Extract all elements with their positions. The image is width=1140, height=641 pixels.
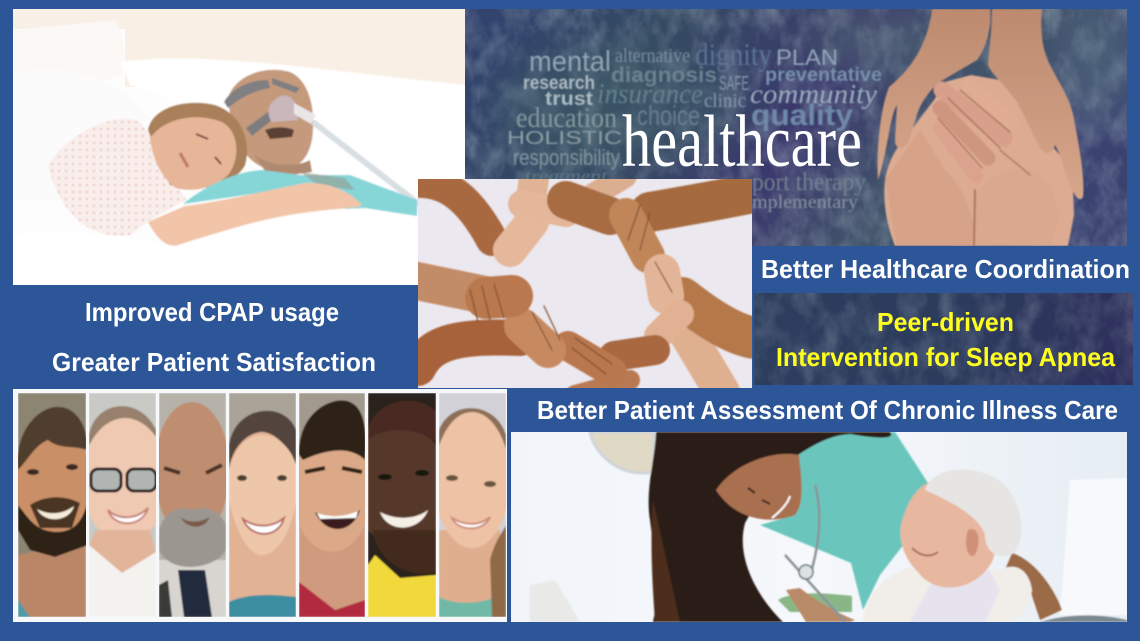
caption: improved CPAP usage and satisfaction xyxy=(52,297,376,377)
arm xyxy=(148,183,362,246)
panel: smiling faces strip xyxy=(13,389,510,622)
word cloud: insurance xyxy=(597,79,703,110)
face 3: older bearded man xyxy=(159,393,226,617)
nurse face xyxy=(716,454,802,520)
photo: couple sleeping with CPAP mask xyxy=(13,9,465,285)
word cloud: choice xyxy=(637,100,700,131)
word cloud: clinic xyxy=(704,90,746,112)
word cloud: trust xyxy=(545,89,594,110)
patient fleece xyxy=(863,567,1032,622)
word cloud: quality xyxy=(751,99,853,132)
word cloud: mental xyxy=(529,46,611,78)
word cloud xyxy=(507,36,882,213)
nurse scrubs xyxy=(760,432,928,610)
photo: linked arms teamwork circle xyxy=(412,172,758,395)
icon: caring hands xyxy=(877,9,1083,246)
word cloud: education xyxy=(516,103,617,134)
word cloud: HOLISTIC xyxy=(507,128,622,148)
text: greater patient satisfaction: Greater Patient Satisfaction xyxy=(52,347,376,377)
patient head xyxy=(900,479,996,588)
face 1: curly haired bearded man xyxy=(18,393,86,617)
photo: word cloud and caring hands xyxy=(465,0,1140,246)
caption: better healthcare coordination: Better Healthcare Coordination xyxy=(761,254,1130,284)
man with CPAP mask xyxy=(224,70,420,205)
word cloud: alternative xyxy=(615,45,690,67)
word cloud: responsibility xyxy=(513,145,620,170)
heading: intervention for sleep apnea: Intervention for Sleep Apnea xyxy=(776,342,1116,372)
word cloud: PLAN xyxy=(776,45,838,70)
nurse hair xyxy=(649,432,891,622)
word cloud: treatment xyxy=(525,166,608,186)
word cloud: community xyxy=(750,79,877,109)
face 5: laughing young man xyxy=(299,393,365,617)
word cloud: diagnosis xyxy=(611,64,717,87)
word cloud: dignity xyxy=(695,36,772,72)
word: healthcare: healthcare xyxy=(622,101,862,183)
nurse forearm xyxy=(786,588,855,622)
face 4: smiling woman with fringe xyxy=(229,393,296,617)
photo: nurse with elderly patient xyxy=(511,432,1127,622)
face 7: smiling girl xyxy=(439,393,506,617)
teal shirts xyxy=(183,170,417,218)
word cloud: mplementary xyxy=(752,192,859,213)
word cloud: research xyxy=(523,73,595,94)
woman asleep xyxy=(48,103,247,236)
face 6: smiling dark-skinned young man xyxy=(368,393,436,617)
heading: peer-driven: Peer-driven xyxy=(877,307,1014,337)
panel: peer-driven intervention xyxy=(754,293,1133,385)
text: improved CPAP usage: Improved CPAP usage xyxy=(85,297,339,327)
duvet xyxy=(169,207,418,247)
wall clock xyxy=(590,432,654,473)
word cloud: SAFE xyxy=(719,73,749,95)
word cloud: port therapy xyxy=(752,169,866,196)
dark chair xyxy=(1040,615,1127,622)
face 2: woman with glasses xyxy=(89,393,156,616)
word cloud: preventative xyxy=(765,65,882,86)
stethoscope xyxy=(785,485,845,622)
